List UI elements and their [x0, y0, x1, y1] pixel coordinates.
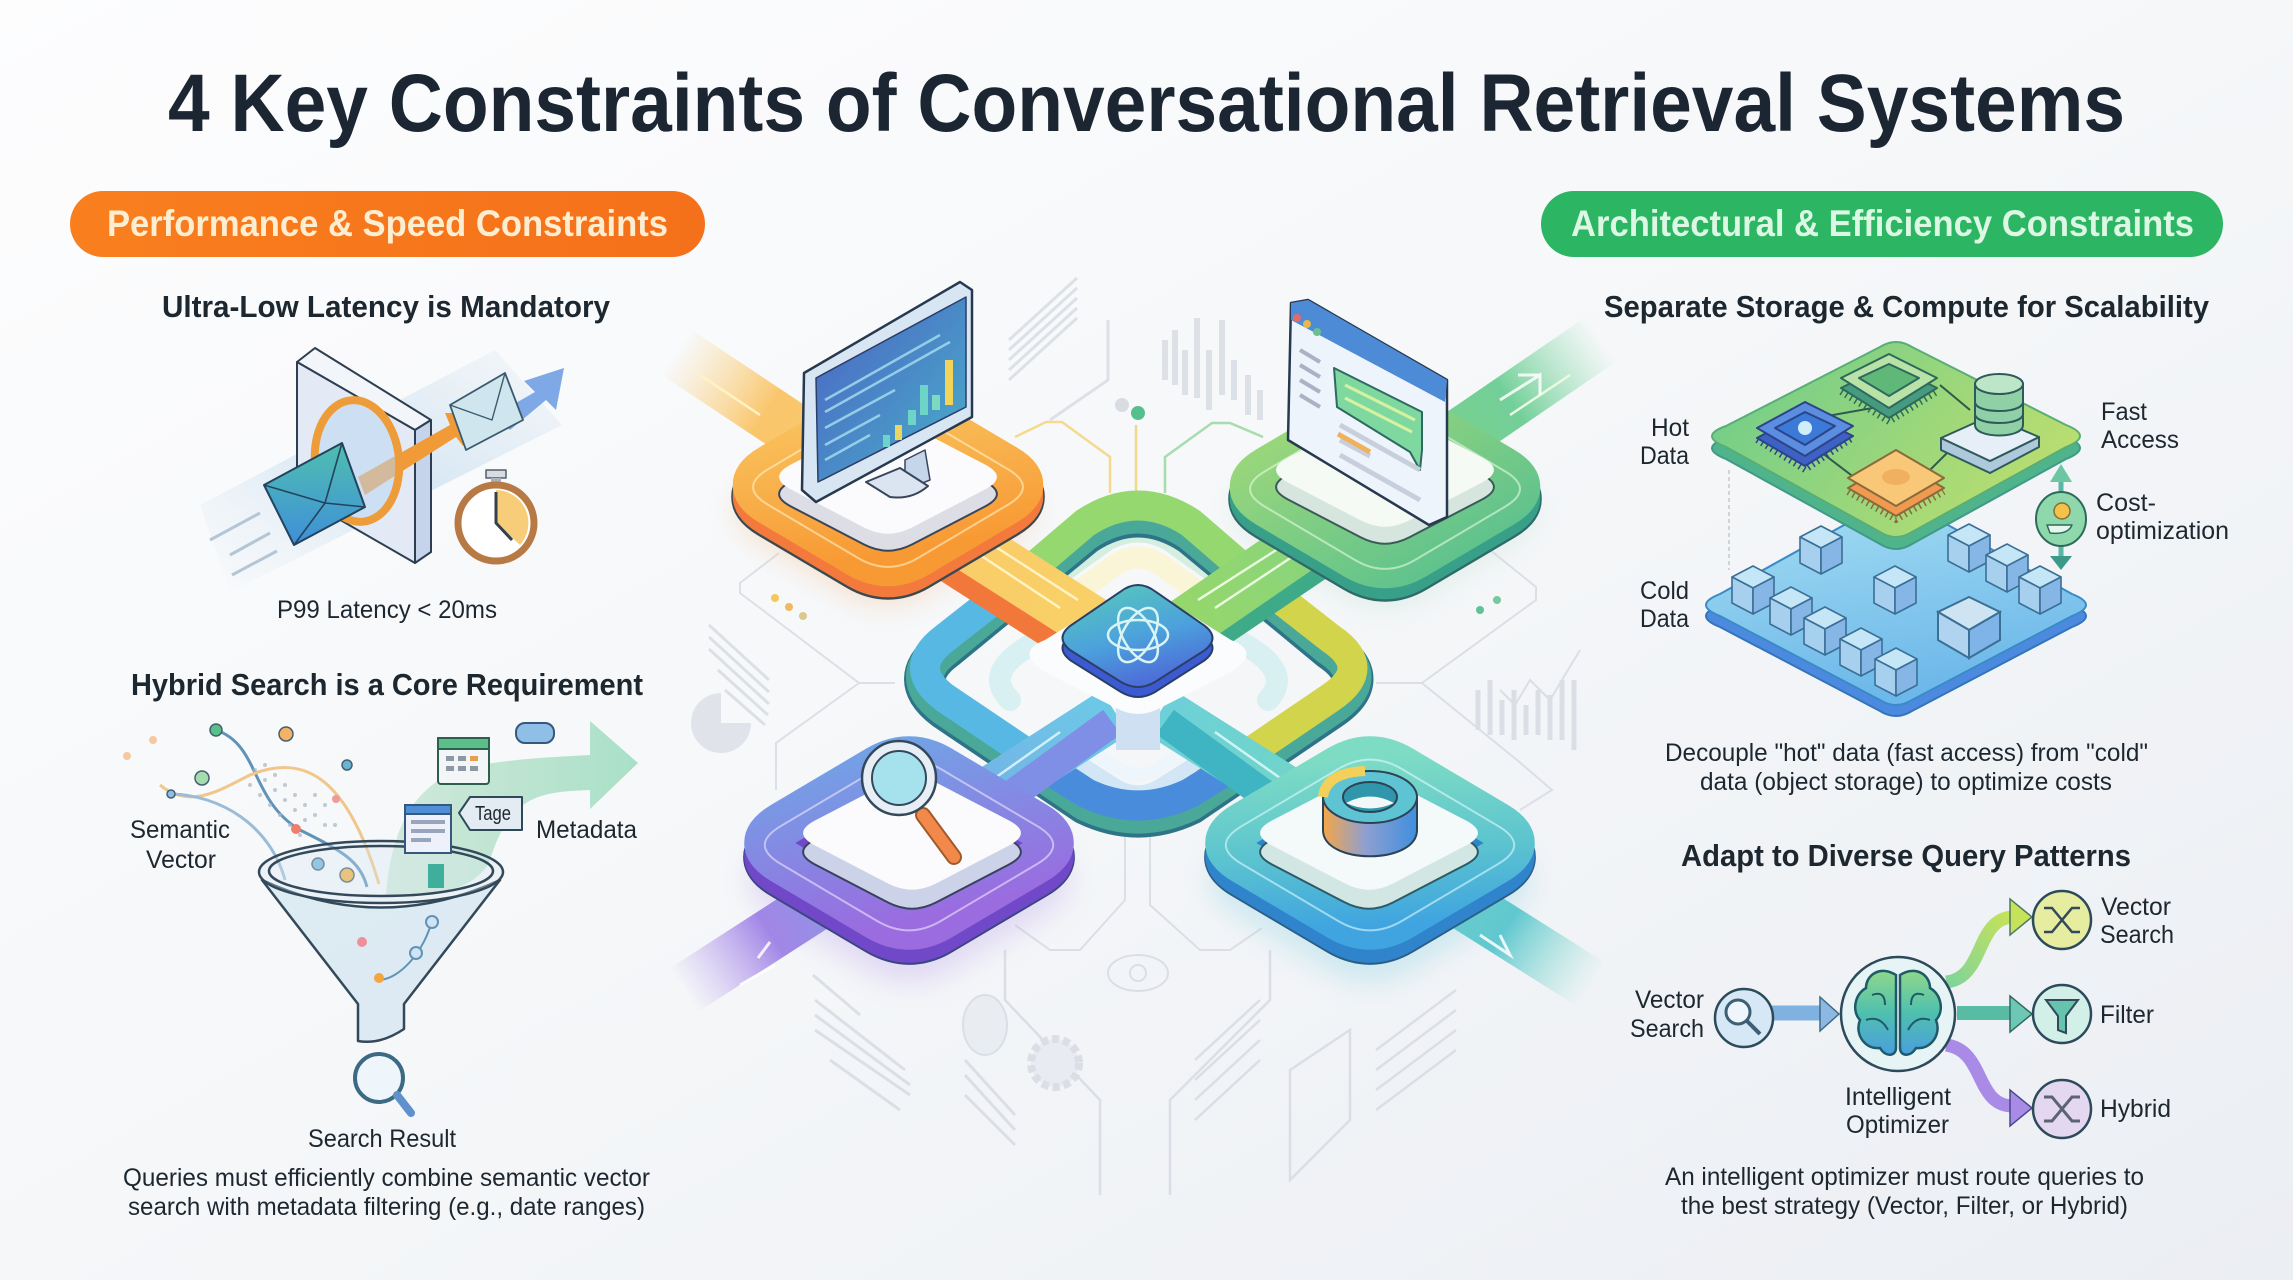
orange section pill	[70, 191, 705, 257]
filter node	[2033, 985, 2091, 1043]
panel: performance and speed constraints	[70, 191, 705, 1221]
platform: storage	[1260, 771, 1478, 909]
pill icon	[516, 723, 554, 743]
document icon	[405, 805, 451, 853]
platform: chat window	[1276, 300, 1494, 544]
description: decouple data: Decouple "hot" data (fast access) from "cold"	[1665, 739, 2148, 767]
platform: search	[803, 741, 1021, 909]
ring track: green, upper right	[1250, 409, 1520, 577]
glow shadows under platforms	[753, 432, 1517, 964]
orange diagonal track	[676, 352, 1100, 642]
magnifier icon	[862, 741, 954, 857]
labels around query routing: Filter	[2100, 1001, 2154, 1029]
central hub	[1030, 585, 1246, 750]
central isometric diagram	[676, 278, 1600, 1195]
loop track around hub	[925, 506, 1352, 816]
storage cubes	[1732, 524, 2061, 696]
labels around query routing: Intelligent	[1845, 1083, 1951, 1111]
chat browser icon	[1288, 300, 1447, 525]
heading: ultra-low latency: Ultra-Low Latency is Mandatory	[162, 289, 611, 324]
funnel rim	[259, 841, 503, 903]
labels around data layers: Hot	[1651, 414, 1689, 442]
dot mesh	[248, 763, 337, 837]
caption: p99 latency: P99 Latency < 20ms	[277, 596, 497, 624]
vector search node	[2033, 891, 2091, 949]
description: hybrid search: search with metadata filtering (e.g., date ranges)	[128, 1193, 645, 1221]
cost optimization badge	[2036, 464, 2086, 570]
optimizer brain node	[1841, 957, 1955, 1071]
inner branches to hub base	[985, 722, 1290, 800]
labels around query routing: Search	[2100, 921, 2174, 949]
labels around query routing: Search	[1630, 1015, 1704, 1043]
labels around data layers: optimization	[2096, 517, 2229, 545]
teal diagonal track: hub to lower right	[1160, 712, 1592, 985]
ring track: teal, lower right	[1226, 759, 1514, 941]
labels around query routing: Vector	[1635, 986, 1704, 1014]
green section pill: Architectural & Efficiency Constraints	[1571, 203, 2194, 244]
calendar icon	[438, 738, 489, 784]
tag icon: Tage	[475, 803, 511, 825]
description: intelligent optimizer: An intelligent optimizer must route queries to	[1665, 1163, 2144, 1191]
faint background charts and documents	[709, 278, 1580, 1195]
green chip	[1841, 354, 1937, 422]
heading: separate storage and compute: Separate Storage & Compute for Scalability	[1604, 289, 2210, 324]
description: decouple data: data (object storage) to optimize costs	[1700, 768, 2112, 796]
inner pale concentric arcs	[1000, 538, 1277, 792]
labels around data layers: Cost-	[2096, 489, 2156, 517]
labels around funnel	[130, 816, 637, 1153]
labels around funnel: Search Result	[308, 1125, 456, 1153]
funnel body	[262, 880, 500, 1042]
labels around data layers: Cold	[1640, 577, 1689, 605]
data dots	[123, 724, 354, 882]
server and database	[1941, 374, 2039, 473]
cold data platform	[1706, 500, 2086, 716]
green section pill	[1541, 191, 2223, 257]
ring cylinder icon	[1323, 771, 1417, 856]
connector lines to top center	[1015, 398, 1263, 493]
labels around funnel: Semantic	[130, 816, 230, 844]
heading: hybrid search: Hybrid Search is a Core Requirement	[131, 667, 643, 702]
purple diagonal track: hub to lower left	[684, 712, 1115, 990]
blue chip	[1757, 402, 1853, 470]
labels around data layers	[1640, 398, 2229, 633]
labels around query routing: Vector	[2101, 893, 2171, 921]
labels around data layers: Access	[2101, 426, 2179, 454]
illustration: hot and cold data layers	[1706, 342, 2086, 716]
description: hybrid search	[123, 1164, 650, 1221]
title: 4 Key Constraints of Conversational Retrieval Systems	[168, 58, 2125, 149]
labels around funnel: Vector	[146, 846, 216, 874]
faint pie chart	[691, 693, 751, 753]
labels around data layers: Fast	[2101, 398, 2147, 426]
heading: adapt to query patterns: Adapt to Diverse Query Patterns	[1681, 838, 2131, 873]
labels around data layers: Data	[1640, 605, 1689, 633]
labels around query routing: Optimizer	[1846, 1111, 1949, 1139]
labels around query routing: Hybrid	[2100, 1095, 2171, 1123]
small accent dots	[771, 594, 1501, 620]
description: intelligent optimizer	[1665, 1163, 2144, 1220]
orange chip	[1848, 450, 1944, 520]
hybrid node	[2033, 1080, 2091, 1138]
labels around query routing	[1630, 893, 2174, 1139]
green diagonal track	[1180, 340, 1600, 642]
illustration: funnel combining vector and metadata	[123, 721, 638, 1113]
ring track: purple, lower left	[765, 759, 1053, 941]
diagram: query routing	[1715, 891, 2091, 1138]
track flow arrows	[740, 375, 1540, 985]
ring track: orange, upper left	[753, 407, 1023, 575]
orange section pill: Performance & Speed Constraints	[107, 203, 668, 244]
illustration: envelope passing through gate	[200, 348, 564, 592]
hub swirl icon	[1108, 602, 1168, 668]
input search node	[1715, 989, 1773, 1047]
labels around data layers: Data	[1640, 442, 1689, 470]
platform: monitor	[779, 282, 997, 551]
description: intelligent optimizer: the best strategy (Vector, Filter, or Hybrid)	[1681, 1192, 2128, 1220]
green metadata arrow	[386, 721, 638, 896]
description: decouple data	[1665, 739, 2148, 796]
semantic vector streams	[160, 730, 379, 887]
description: hybrid search: Queries must efficiently combine semantic vector	[123, 1164, 650, 1192]
route arrows	[1771, 899, 2032, 1126]
panel: architectural and efficiency constraints	[1541, 191, 2229, 1220]
monitor icon	[802, 282, 972, 502]
magnifier icon	[355, 1054, 411, 1113]
tag icon	[459, 797, 522, 830]
hot data platform	[1712, 342, 2080, 549]
labels around funnel: Metadata	[536, 816, 637, 844]
